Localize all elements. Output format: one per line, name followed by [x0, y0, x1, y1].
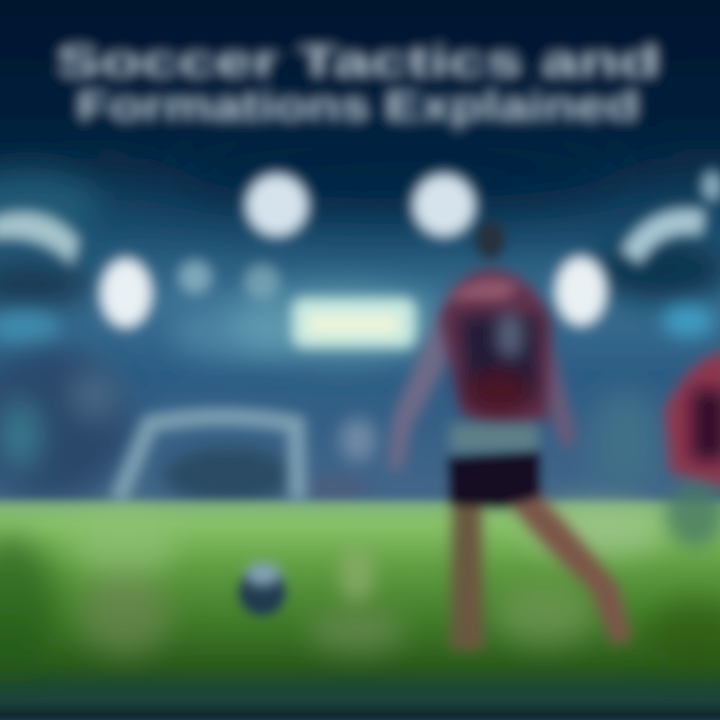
player arms [388, 310, 456, 470]
scoreboard glow [230, 285, 450, 365]
goal frame [118, 417, 298, 503]
player waist [450, 424, 538, 452]
main player [388, 221, 632, 650]
player shorts [448, 452, 540, 508]
player legs [450, 490, 484, 650]
second player [664, 350, 720, 547]
soccer ball [238, 563, 286, 616]
title [56, 37, 660, 129]
stadium lights [0, 170, 720, 328]
pitch [0, 502, 720, 720]
title: Soccer Tactics and [56, 37, 660, 86]
title: Formations Explained [77, 82, 639, 129]
player jersey [438, 268, 552, 425]
player head [475, 221, 505, 259]
